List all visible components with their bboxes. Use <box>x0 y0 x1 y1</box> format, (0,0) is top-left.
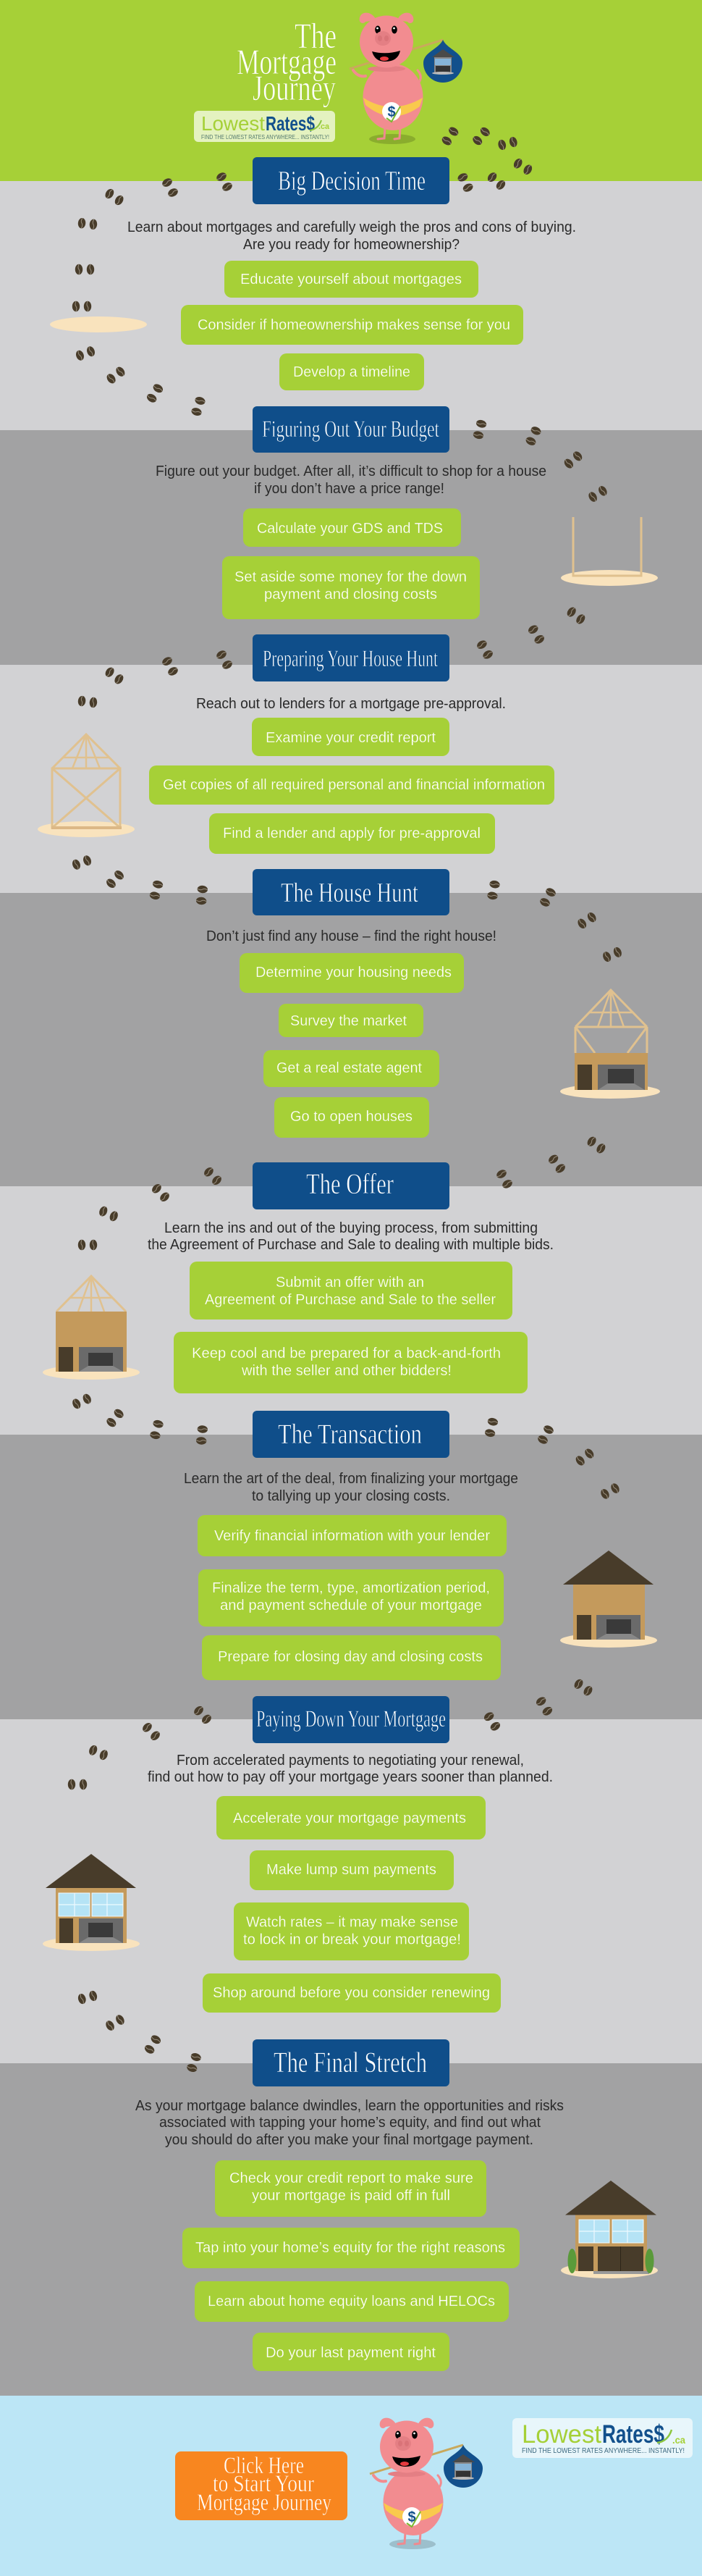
text block <box>135 2098 564 2148</box>
button <box>181 305 523 345</box>
button: Get copies of all required personal and financial information <box>163 777 545 793</box>
footprints: section 1 <box>72 171 507 417</box>
footprints: section 3 <box>71 649 234 889</box>
button: Examine your credit report <box>266 730 436 746</box>
icon: pig mascot with house bundle <box>350 13 462 144</box>
icon: pig mascot with house bundle <box>370 2418 483 2549</box>
icon: house with roof <box>560 1551 657 1648</box>
panel: The Final Stretch <box>0 2039 702 2396</box>
button: Set aside some money for the down <box>234 569 467 585</box>
button: Watch rates – it may make sense <box>246 1915 458 1931</box>
button: with the seller and other bidders! <box>241 1363 452 1379</box>
button: your mortgage is paid off in full <box>252 2188 450 2204</box>
heading: The Transaction <box>278 1419 422 1450</box>
logo: LowestRates.ca: Rates$ <box>602 2420 664 2449</box>
icon: empty lot <box>50 316 147 332</box>
button: Educate yourself about mortgages <box>240 272 462 288</box>
icon: finished house with shrubs <box>561 2181 658 2278</box>
text block: From accelerated payments to negotiating your renewal, <box>177 1753 524 1769</box>
button <box>252 718 449 756</box>
logo: LowestRates.ca: Rates$ <box>266 112 315 135</box>
logo: LowestRates.ca: .ca <box>318 122 330 131</box>
text block: Learn the ins and out of the buying process, from submitting <box>164 1220 538 1236</box>
button: payment and closing costs <box>264 587 437 603</box>
heading <box>253 1696 449 1743</box>
button: Do your last payment right <box>266 2345 436 2361</box>
title: Mortgage <box>237 41 337 82</box>
heading: The Offer <box>306 1167 394 1200</box>
button: Calculate your GDS and TDS <box>257 521 443 537</box>
button: Learn about home equity loans and HELOCs <box>208 2294 495 2309</box>
call to action button: Click Here <box>224 2453 304 2479</box>
heading <box>253 1411 449 1458</box>
button <box>149 765 554 805</box>
text block: Reach out to lenders for a mortgage pre-approval. <box>196 696 506 712</box>
button <box>216 1796 486 1839</box>
heading: The Final Stretch <box>274 2046 427 2078</box>
icon: house frame <box>38 734 135 837</box>
button <box>195 2281 509 2322</box>
text block: find out how to pay off your mortgage years sooner than planned. <box>148 1769 553 1785</box>
button: Consider if homeownership makes sense for you <box>198 317 510 333</box>
button: Prepare for closing day and closing costs <box>218 1649 483 1665</box>
button <box>224 261 478 298</box>
button <box>190 1262 512 1320</box>
footprints: section 5 <box>71 1166 514 1429</box>
text block <box>148 1220 554 1253</box>
panel: The House Hunt <box>0 869 702 1186</box>
button: Go to open houses <box>290 1109 413 1125</box>
text block: you should do after you make your final mortgage payment. <box>165 2132 533 2148</box>
button: Survey the market <box>290 1013 407 1029</box>
button <box>274 1097 429 1138</box>
button <box>222 556 480 619</box>
icon: pig mascot with house bundle: $ <box>387 104 396 120</box>
button: and payment schedule of your mortgage <box>220 1598 482 1614</box>
text block: Learn the art of the deal, from finalizing your mortgage <box>184 1471 518 1487</box>
call to action button <box>175 2451 347 2520</box>
button <box>279 353 424 390</box>
text block <box>184 1471 518 1504</box>
text block <box>127 219 576 253</box>
footprints: section 2 <box>473 419 609 660</box>
text block: if you don’t have a price range! <box>254 481 444 497</box>
button <box>198 1515 507 1556</box>
button: Accelerate your mortgage payments <box>233 1811 466 1826</box>
button: Check your credit report to make sure <box>229 2170 473 2186</box>
panel: Preparing Your House Hunt <box>0 634 702 893</box>
icon: house with walls and open roof frame <box>43 1276 140 1380</box>
text block: Figure out your budget. After all, it’s difficult to shop for a house <box>156 463 546 479</box>
text block: Are you ready for homeownership? <box>243 237 460 253</box>
button <box>215 2160 486 2217</box>
panel: Paying Down Your Mortgage <box>0 1696 702 2063</box>
title: Journey <box>253 67 336 108</box>
button <box>203 1973 501 2013</box>
icon: pig mascot with house bundle: $ <box>407 2509 416 2525</box>
heading: Preparing Your House Hunt <box>263 646 438 672</box>
text block: the Agreement of Purchase and Sale to dealing with multiple bids. <box>148 1237 554 1253</box>
button <box>240 953 464 993</box>
footprints: section 4 <box>149 879 623 1175</box>
text block <box>148 1753 553 1785</box>
button <box>234 1902 469 1960</box>
heading <box>253 634 449 681</box>
heading <box>253 2039 449 2086</box>
button <box>279 1004 423 1037</box>
button: Keep cool and be prepared for a back-and-forth <box>192 1346 501 1362</box>
button <box>202 1635 501 1680</box>
button: Shop around before you consider renewing <box>213 1985 490 2001</box>
button: Agreement of Purchase and Sale to the seller <box>205 1292 496 1308</box>
heading <box>253 157 449 204</box>
text block <box>156 463 546 497</box>
heading: Big Decision Time <box>278 166 426 196</box>
button: Verify financial information with your lender <box>214 1528 490 1544</box>
heading <box>253 869 449 915</box>
button <box>253 2333 449 2371</box>
heading <box>253 406 449 453</box>
button: Tap into your home’s equity for the right reasons <box>195 2240 505 2256</box>
button: Find a lender and apply for pre-approval <box>223 826 481 842</box>
panel: call to action footer <box>0 2396 702 2576</box>
button: to lock in or break your mortgage! <box>243 1932 461 1948</box>
logo: LowestRates.ca: Lowest <box>522 2420 601 2449</box>
title: The <box>295 15 337 56</box>
button: Develop a timeline <box>293 364 410 380</box>
logo: LowestRates.ca <box>512 2418 693 2458</box>
button <box>198 1569 504 1627</box>
button: Make lump sum payments <box>266 1862 436 1878</box>
logo: LowestRates.ca: Lowest <box>201 112 265 135</box>
icon: house foundation posts <box>561 517 658 586</box>
button: Get a real estate agent <box>276 1060 422 1076</box>
button: Determine your housing needs <box>255 965 452 981</box>
text block: Learn about mortgages and carefully weigh the pros and cons of buying. <box>127 219 576 235</box>
panel: title header <box>0 0 702 181</box>
footprints: from mascot <box>440 125 534 176</box>
text block: As your mortgage balance dwindles, learn the opportunities and risks <box>135 2098 564 2114</box>
button <box>250 1850 454 1890</box>
logo: LowestRates.ca <box>194 111 335 142</box>
panel: The Transaction <box>0 1411 702 1719</box>
footprints: section 6 <box>149 1417 621 1717</box>
icon: house with windows <box>43 1854 140 1951</box>
button: Submit an offer with an <box>276 1275 424 1291</box>
title <box>237 15 337 108</box>
button <box>174 1332 528 1393</box>
button <box>243 508 461 547</box>
icon: house under construction, ground floor <box>560 990 660 1099</box>
panel: The Offer <box>0 1162 702 1435</box>
call to action button: Mortgage Journey <box>197 2490 331 2516</box>
button: Finalize the term, type, amortization period, <box>212 1580 490 1596</box>
footprints: section 7 <box>68 1704 502 2055</box>
logo: LowestRates.ca: .ca <box>672 2434 685 2446</box>
heading: Figuring Out Your Budget <box>262 416 439 442</box>
panel: Figuring Out Your Budget <box>0 406 702 665</box>
call to action button: to Start Your <box>213 2471 314 2497</box>
button <box>209 813 495 854</box>
footprints: section 8 <box>186 2052 202 2073</box>
text block: associated with tapping your home’s equity, and find out what <box>159 2115 541 2131</box>
text block: Don’t just find any house – find the right house! <box>206 928 496 944</box>
logo: LowestRates.ca: FIND THE LOWEST RATES ANYWHERE... INSTANTLY! <box>201 133 329 140</box>
text block: to tallying up your closing costs. <box>252 1488 450 1504</box>
button <box>263 1050 439 1087</box>
heading <box>253 1162 449 1209</box>
button <box>182 2228 520 2268</box>
heading: Paying Down Your Mortgage <box>256 1706 446 1732</box>
heading: The House Hunt <box>281 878 418 908</box>
panel: Big Decision Time <box>0 157 702 430</box>
